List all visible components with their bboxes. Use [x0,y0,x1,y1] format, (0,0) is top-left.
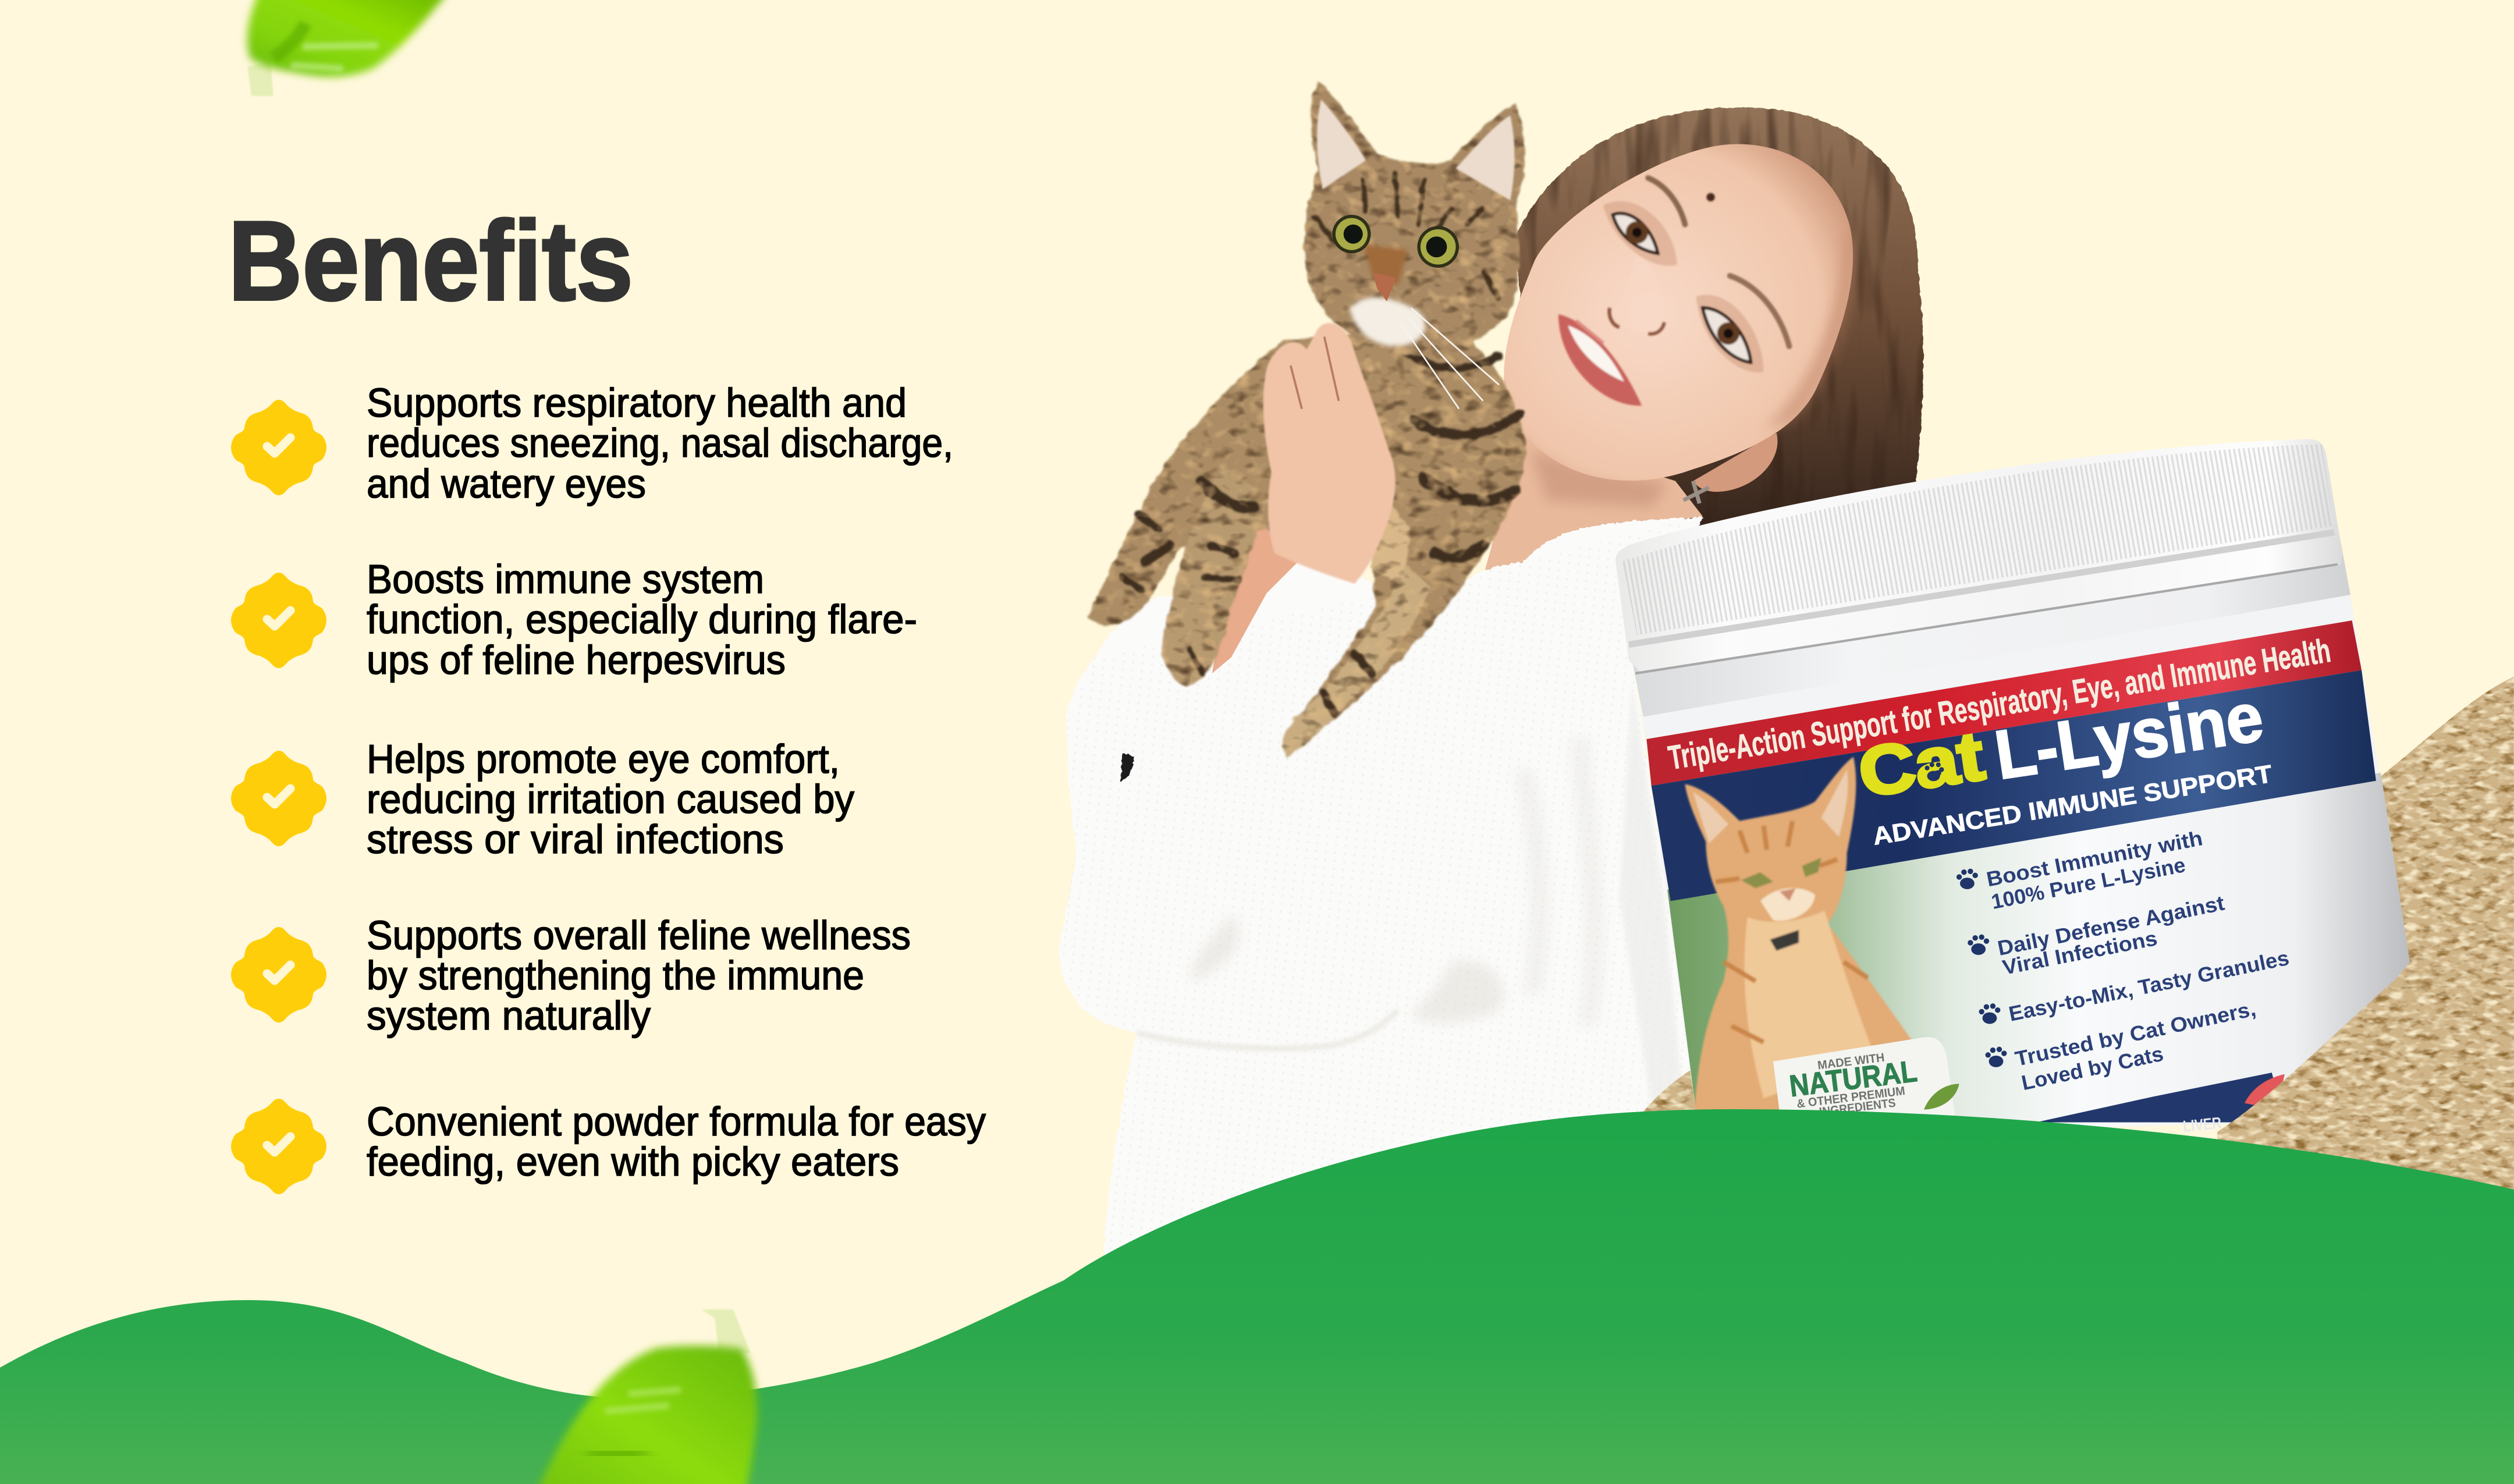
left sand [1635,1058,1731,1138]
text: eye comfort: Helps promote eye comfort, [367,736,840,782]
icon: paw [1956,869,1978,889]
text: immune system: function, especially during flare- [367,597,917,642]
badge leaf [1924,1084,1959,1109]
cat eyes [1741,858,1821,888]
dark fur tuft [1121,754,1135,782]
text: respiratory health: and watery eyes [367,461,646,506]
strip text: LIVER [2182,1113,2222,1135]
cat fur body [1087,82,1526,757]
icon: check badge [231,573,326,668]
icon: check badge [231,927,326,1023]
product name: Cat: Cat [1854,718,1989,812]
leaf dark streak [274,23,306,58]
benefit 3 [231,736,854,862]
neck [1483,433,1703,577]
right eye [1703,308,1750,363]
text: eye comfort: stress or viral infections [367,816,784,862]
natural badge: MADE WITH [1817,1051,1886,1073]
text: feline wellness: by strengthening the immune [367,953,864,998]
sweater [1059,516,1703,1283]
product name: L-Lysine: L-Lysine [1990,679,2268,794]
natural badge: & OTHER PREMIUM [1796,1084,1906,1111]
woman [1059,107,1923,1283]
natural badge: NATURAL [1788,1055,1919,1103]
icon: paw in product name [1924,762,1944,781]
bullet 4: Loved by Cats [2019,1042,2165,1095]
cat face pattern [1315,173,1497,297]
bullet 1: Boost Immunity with [1984,826,2204,891]
icon: check badge [231,1099,326,1194]
leaf stem [701,1309,751,1353]
bullet 1: 100% Pure L-Lysine [1989,853,2188,914]
knit texture [1060,518,1703,1283]
text: powder formula: feeding, even with picky eaters [367,1139,899,1184]
text: immune system: ups of feline herpesvirus [367,637,786,683]
bullet 2 [1968,892,2227,979]
face shadow [1764,228,1853,429]
supplement jar [1615,439,2410,1138]
nose shading [1613,257,1663,333]
cat stripes [1716,821,1868,1042]
front sand mound [2217,914,2514,1219]
text: respiratory health [367,380,953,506]
benefit 5 [231,1099,986,1194]
neck shadow [1531,452,1667,507]
earring [1684,481,1709,503]
cat collar [1770,930,1799,951]
tan belly [1371,481,1411,585]
leaf stem [247,61,274,96]
navy band [1652,670,2376,901]
leaf: bottom [535,1309,757,1484]
icon: paw [1979,1003,2000,1024]
left eyebrow [1648,178,1685,225]
text: powder formula: Convenient powder formula for easy [367,1099,986,1144]
face [1504,144,1853,481]
cat front leg [1283,565,1430,757]
text: respiratory health: reduces sneezing, nasal discharge, [367,420,953,466]
left eye [1613,214,1658,253]
text: feline wellness: system naturally [367,993,651,1038]
benefit 2 [231,556,917,683]
cat body [1087,329,1526,757]
label white area [1667,773,2410,1138]
sleeve crease [1137,1010,1398,1049]
facial features [1558,178,1789,406]
mouth [1558,314,1642,406]
text: eye comfort: reducing irritation caused by [367,776,854,822]
side shadow [1620,681,1684,1106]
cat muzzle [1350,297,1425,346]
ear [1693,433,1777,492]
benefit 1 [231,380,953,506]
text: powder formula [367,1099,986,1184]
green wave [0,1109,2514,1484]
forearm [1212,481,1306,673]
cat muzzle [1760,888,1815,921]
cat head [1305,82,1524,355]
right eyebrow [1730,276,1789,346]
tabby stripes [1123,345,1520,712]
title: Benefits [228,198,633,324]
whiskers [1401,308,1499,409]
subtitle: ADVANCED IMMUNE SUPPORT [1871,760,2274,851]
text: respiratory health: Supports respiratory health and [367,380,907,425]
cat left eye [1332,215,1371,253]
hero illustration [1059,82,2514,1283]
text: immune system [367,556,917,683]
leaf dark streak [588,1452,646,1455]
finger lines [1291,337,1338,409]
leaf highlight [605,1390,681,1411]
leaf blade [247,0,451,77]
cat inner ears [1317,100,1514,200]
icon: paw [1968,935,1989,955]
bullet 2: Viral Infections [2001,926,2159,979]
text: feline wellness [367,913,911,1038]
cat right eye [1417,226,1459,268]
bullet 3: Easy-to-Mix, Tasty Granules [2007,946,2291,1026]
icon: check badge [231,400,326,495]
tabby cat and hand [1087,82,1526,757]
icon: check badge [231,751,326,846]
back leg [1163,465,1266,686]
cat ear insides [1693,769,1848,843]
back sand mound [2373,677,2514,1194]
natural badge [1773,1037,1959,1138]
jar body [1637,561,2410,1138]
mole [1706,193,1715,201]
text: feline wellness: Supports overall feline wellness [367,913,911,958]
benefit 4 [231,913,911,1038]
bullet 2: Daily Defense Against [1995,892,2227,960]
ribbing shadow [1523,737,1594,1026]
bullet 1 [1956,826,2204,914]
sweater shadow patches [1191,914,1503,1023]
text: immune system: Boosts immune system [367,556,764,602]
leaf blade [535,1345,757,1484]
benefits list [231,380,986,1194]
red band [1646,620,2362,786]
nostrils [1609,308,1664,334]
cat nose bridge [1363,244,1408,285]
natural badge: INGREDIENTS [1819,1096,1897,1119]
label cat [1685,757,1950,1130]
text: eye comfort [367,736,854,862]
hair [1514,107,1923,561]
bullet 4 [1986,997,2258,1095]
cat nose [1780,888,1796,901]
icon: paw [1986,1046,2007,1067]
bottom navy strip [2036,1073,2285,1135]
eye sockets [1603,201,1764,372]
jar lid [1615,439,2342,673]
cat nose [1372,272,1397,301]
loose hair by jar [1667,956,1699,1085]
leaf highlight [291,45,378,69]
bullet 4: Trusted by Cat Owners, [2013,997,2258,1071]
hand [1263,323,1396,584]
jar neck [1632,542,2350,716]
leaf: top [247,0,451,96]
cat chest shading [1745,911,1876,1098]
